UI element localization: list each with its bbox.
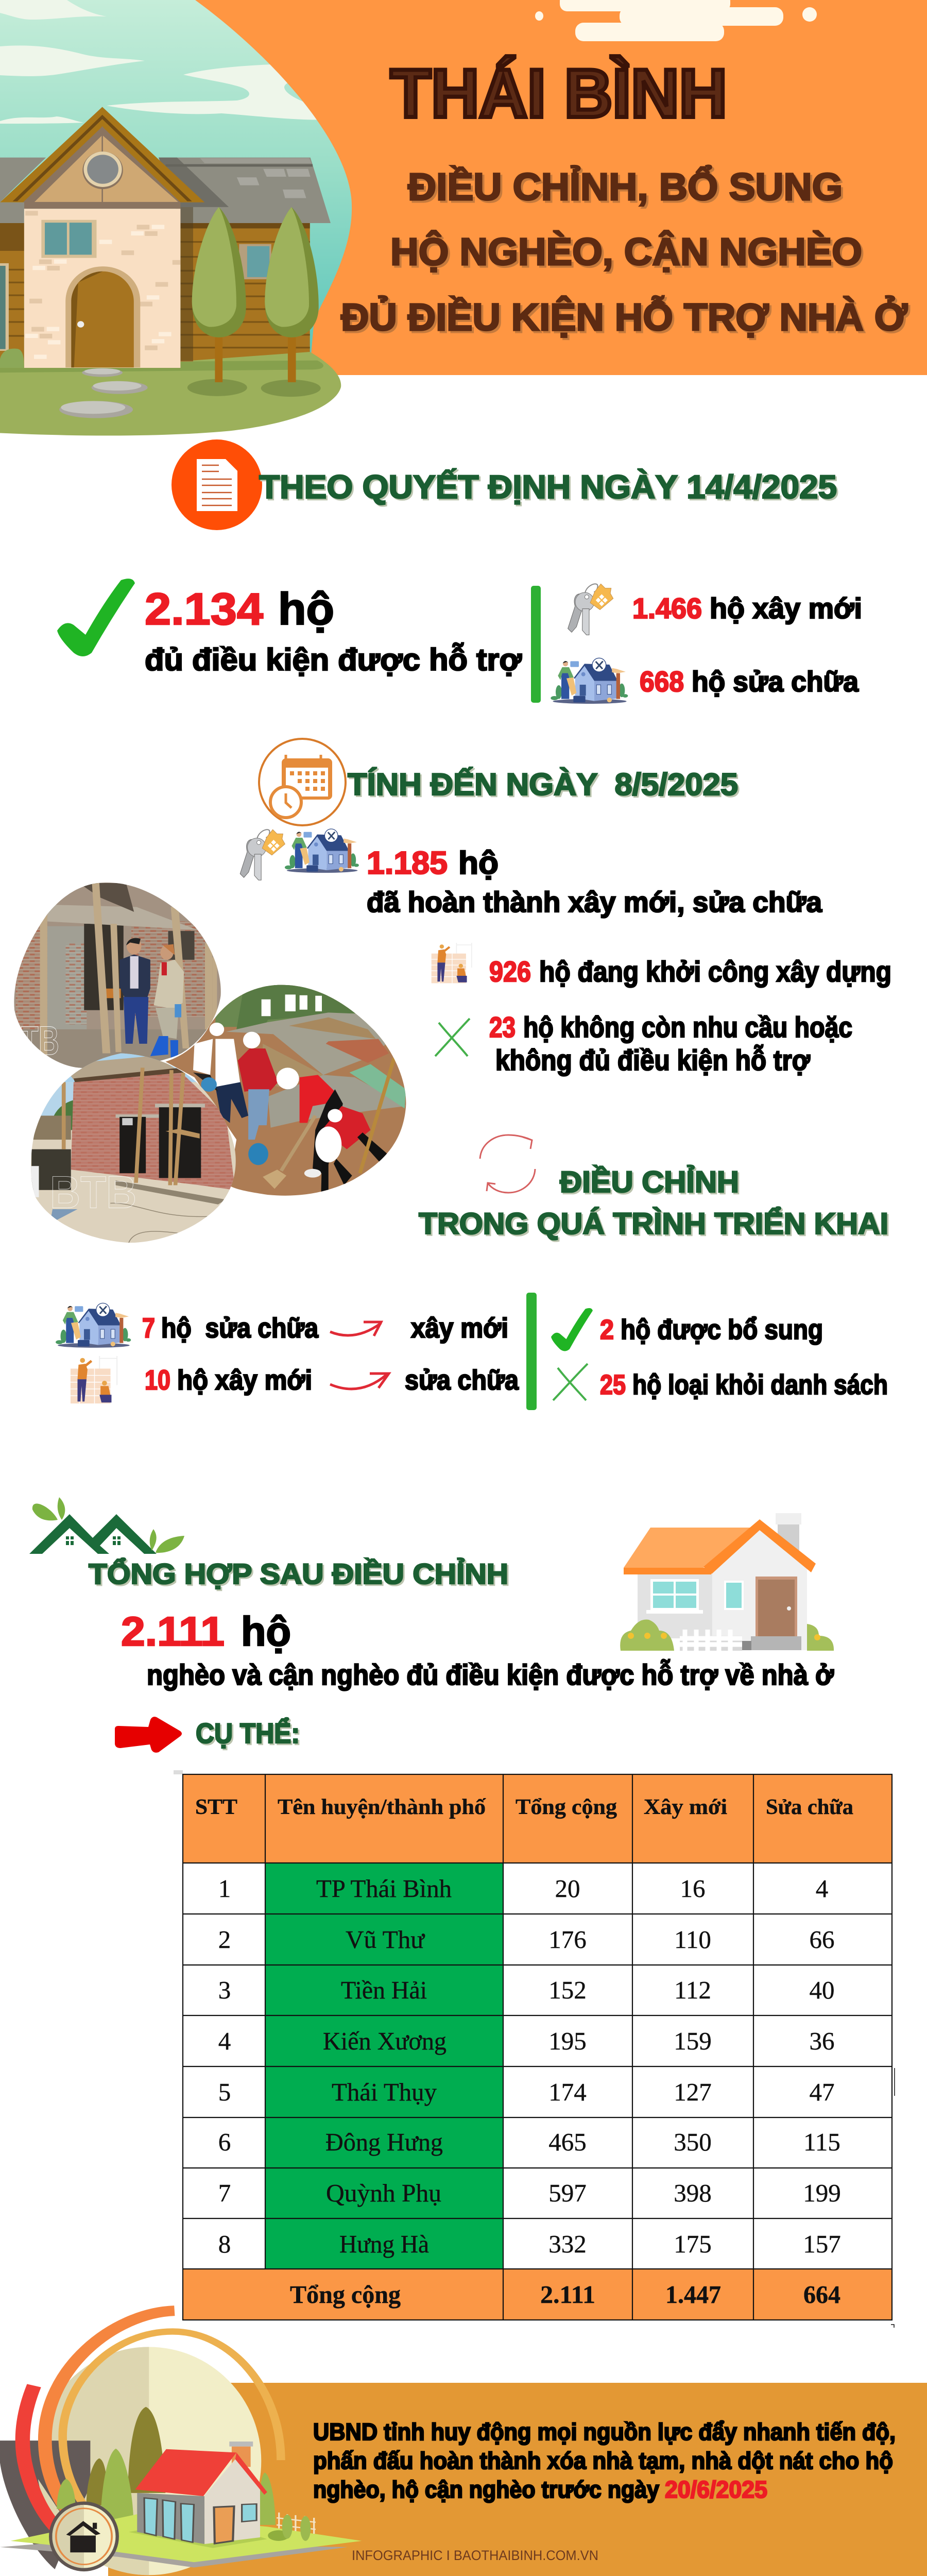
data table xyxy=(174,1770,895,2328)
row: 25 hộ loại khỏi: 25 xyxy=(600,1369,626,1400)
footer message: phấn đấu hoàn thành xóa nhà tạm, nhà dột nát cho hộ xyxy=(313,2447,893,2474)
stat: 926 hộ đang khởi công: hộ đang khởi công xây dựng xyxy=(539,955,891,988)
row: 7 hộ sửa chữa to xây mới: 7 xyxy=(142,1313,155,1344)
table header: Tổng cộng xyxy=(516,1795,617,1819)
stat: 23 hộ không còn nhu cầu: hộ không còn nhu cầu hoặc xyxy=(523,1011,852,1043)
footer message: UBND tỉnh huy động mọi nguồn lực đẩy nhanh tiến độ, xyxy=(313,2418,896,2445)
stat: 23 hộ không còn nhu cầu: 23 xyxy=(489,1011,516,1043)
table row 8: Hưng Hà xyxy=(339,2230,429,2258)
icon: worker xyxy=(71,1356,117,1403)
row: 10 hộ xây mới to sửa chữa: sửa chữa xyxy=(405,1365,519,1396)
icon: cross xyxy=(553,1364,588,1400)
table row 3: 152 xyxy=(548,1976,587,2004)
icon: check mark xyxy=(57,579,135,656)
table row 1: 16 xyxy=(680,1874,706,1903)
table header: Tên huyện/thành phố xyxy=(278,1795,486,1819)
table row 1: 4 xyxy=(816,1874,828,1903)
table row 5 xyxy=(218,2078,834,2106)
table row 5: 174 xyxy=(548,2078,587,2106)
sky dome xyxy=(0,0,352,361)
table row 2: 66 xyxy=(810,1925,834,1954)
heading: điều chỉnh: ĐIỀU CHỈNH xyxy=(560,1165,739,1199)
stat: 2.134 hộ: 2.134 xyxy=(145,584,263,634)
table row 7: 199 xyxy=(803,2179,841,2207)
photo: brick house: BTB xyxy=(50,1167,136,1218)
table header: Xây mới xyxy=(644,1795,727,1819)
table row 2: Vũ Thư xyxy=(346,1925,425,1954)
table header: STT xyxy=(195,1795,237,1819)
house illustration xyxy=(0,107,341,436)
table row 4: 4 xyxy=(218,2027,231,2055)
stat: 1.185 hộ: hộ xyxy=(458,845,499,881)
table grid xyxy=(183,1774,895,2328)
table row 8: 332 xyxy=(548,2230,587,2258)
table row 3: Tiền Hải xyxy=(341,1976,427,2004)
table row 1: TP Thái Bình xyxy=(316,1874,452,1903)
row: 10 hộ xây mới to sửa chữa: hộ xây mới xyxy=(177,1365,312,1396)
icon: house repair xyxy=(551,658,628,704)
table row 7: Quỳnh Phụ xyxy=(326,2179,441,2207)
table row 6 xyxy=(218,2128,840,2156)
table row 1: 1 xyxy=(218,1874,231,1903)
cream clouds xyxy=(535,0,817,41)
stat: 926 hộ đang khởi công: 926 xyxy=(489,955,531,988)
table row 8: 8 xyxy=(218,2230,231,2258)
footer illustration xyxy=(0,2311,362,2575)
stat: 668 hộ sửa chữa: hộ sửa chữa xyxy=(692,665,859,698)
row: 25 hộ loại khỏi: hộ loại khỏi danh sách xyxy=(632,1369,888,1400)
table total row: 664 xyxy=(803,2280,840,2309)
table row 1: 20 xyxy=(555,1874,580,1903)
table row 7: 7 xyxy=(218,2179,231,2207)
table header xyxy=(195,1795,853,1819)
stat: 2.134 hộ xyxy=(145,584,522,677)
sky clouds xyxy=(0,0,332,124)
arrow xyxy=(330,1374,389,1389)
table row 3: 112 xyxy=(674,1976,711,2004)
table row 8: 157 xyxy=(803,2230,841,2258)
table row 7 xyxy=(218,2179,841,2207)
heading: tổng hợp: TỔNG HỢP SAU ĐIỀU CHỈNH xyxy=(89,1557,508,1590)
table row 4: 195 xyxy=(548,2027,587,2055)
stat: 2.134 hộ: đủ điều kiện được hỗ trợ xyxy=(145,642,522,677)
heading: điều chỉnh xyxy=(419,1165,888,1241)
row: 10 hộ xây mới to sửa chữa: 10 xyxy=(145,1365,170,1396)
heading: điều chỉnh: TRONG QUÁ TRÌNH TRIỂN KHAI xyxy=(419,1207,888,1241)
headline lines: ĐIỀU CHỈNH, BỔ SUNG xyxy=(408,165,843,208)
icon: green roofs logo xyxy=(29,1497,184,1554)
table row 2: 2 xyxy=(218,1925,231,1954)
table row 6: 465 xyxy=(548,2128,587,2156)
table row 4: 159 xyxy=(674,2027,712,2055)
icon: worker xyxy=(432,943,472,983)
title: Thái Bình: THÁI BÌNH xyxy=(390,56,727,132)
photo: two people at construction site: TB xyxy=(21,1018,59,1063)
stat: 2.111 hộ: hộ xyxy=(241,1608,291,1654)
icon: document xyxy=(171,439,262,530)
stat: 2.111 hộ: nghèo và cận nghèo đủ điều kiện được hỗ trợ về nhà ở xyxy=(147,1658,834,1691)
orange background xyxy=(0,0,927,375)
table row 8 xyxy=(218,2230,841,2258)
row: 10 hộ xây mới to sửa chữa xyxy=(145,1365,519,1396)
table row 6: Đông Hưng xyxy=(325,2128,443,2156)
table row 1 xyxy=(218,1874,828,1903)
stat: 1.466 hộ xây mới: hộ xây mới xyxy=(710,592,862,624)
stat: 1.466 hộ xây mới xyxy=(632,592,862,624)
row: 2 hộ được bổ sung: hộ được bổ sung xyxy=(621,1314,823,1345)
table row 2: 176 xyxy=(548,1925,587,1954)
photo: brick house xyxy=(26,1051,242,1245)
row: 7 hộ sửa chữa to xây mới xyxy=(142,1313,508,1344)
icon: keys xyxy=(568,584,613,635)
arrow xyxy=(330,1322,381,1336)
table total row xyxy=(290,2280,840,2309)
table header: Sửa chữa xyxy=(766,1795,853,1819)
icon: orange roof house xyxy=(620,1513,834,1651)
row: 2 hộ được bổ sung: 2 xyxy=(600,1314,614,1345)
section heading: theo quyết định xyxy=(171,439,837,530)
table row 4 xyxy=(218,2027,834,2055)
icon: house repair small xyxy=(285,829,359,873)
table row 3 xyxy=(218,1976,834,2004)
section heading: tính đến ngày: TÍNH ĐẾN NGÀY 8/5/2025 xyxy=(348,767,738,802)
stat: 23 hộ không còn nhu cầu: không đủ điều kiện hỗ trợ xyxy=(495,1044,810,1076)
table row 5: 47 xyxy=(810,2078,834,2106)
green divider xyxy=(526,1293,537,1410)
photo: two people at construction site xyxy=(14,883,221,1068)
table total row: 1.447 xyxy=(665,2280,721,2309)
headline lines: ĐỦ ĐIỀU KIỆN HỖ TRỢ NHÀ Ở xyxy=(341,296,908,338)
stat: 1.185 hộ: 1.185 xyxy=(367,845,448,881)
heading: cụ thể: CỤ THỂ: xyxy=(196,1717,300,1749)
table row 6: 6 xyxy=(218,2128,231,2156)
badge xyxy=(49,2501,119,2571)
icon: house repair xyxy=(56,1303,131,1348)
table row 2 xyxy=(218,1925,834,1954)
table total row: 2.111 xyxy=(540,2280,595,2309)
table row 6: 115 xyxy=(803,2128,840,2156)
footer message: nghèo, hộ cận nghèo trước ngày xyxy=(313,2476,659,2503)
stat: 1.185 hộ: đã hoàn thành xây mới, sửa chữa xyxy=(367,886,822,918)
table row 3: 3 xyxy=(218,1976,231,2004)
table fills xyxy=(174,1770,892,2320)
table row 5: Thái Thụy xyxy=(332,2078,437,2106)
row: 7 hộ sửa chữa to xây mới: xây mới xyxy=(411,1313,508,1344)
icon: red arrow xyxy=(115,1717,182,1753)
table row 7: 398 xyxy=(674,2179,712,2207)
table row 5: 5 xyxy=(218,2078,231,2106)
stat: 1.466 hộ xây mới: 1.466 xyxy=(632,592,702,624)
table row 4: 36 xyxy=(810,2027,834,2055)
icon: cross xyxy=(435,1019,470,1056)
table total row: Tổng cộng xyxy=(290,2280,401,2309)
headline lines: HỘ NGHÈO, CẬN NGHÈO xyxy=(390,230,862,273)
icon: keys small xyxy=(240,829,285,880)
stat: 23 hộ không còn nhu cầu xyxy=(489,1011,852,1076)
stat: 2.111 hộ: 2.111 xyxy=(121,1608,225,1654)
icon: check mark xyxy=(551,1308,593,1351)
footer credit: INFOGRAPHIC I BAOTHAIBINH.COM.VN xyxy=(352,2548,598,2563)
table row 3: 40 xyxy=(810,1976,834,2004)
icon: calendar xyxy=(259,739,346,825)
row: 7 hộ sửa chữa to xây mới: hộ sửa chữa xyxy=(161,1313,319,1344)
footer band xyxy=(108,2383,927,2576)
green divider xyxy=(531,586,541,703)
table row 8: 175 xyxy=(674,2230,712,2258)
table row 2: 110 xyxy=(674,1925,711,1954)
footer message: 20/6/2025 xyxy=(665,2476,767,2503)
stat: 2.134 hộ: hộ xyxy=(278,584,334,634)
photo collage xyxy=(0,876,413,1245)
stat: 2.111 hộ xyxy=(121,1608,834,1691)
section heading: tính đến ngày xyxy=(259,739,738,825)
table row 5: 127 xyxy=(674,2078,712,2106)
headline lines xyxy=(341,165,908,338)
header banner xyxy=(0,0,927,436)
stat: 1.185 hộ xyxy=(367,845,822,918)
stat: 668 hộ sửa chữa: 668 xyxy=(640,665,684,698)
table row 6: 350 xyxy=(674,2128,712,2156)
footer message xyxy=(313,2418,896,2503)
icon: cycle arrows xyxy=(480,1135,535,1193)
photo: volunteers digging foundation xyxy=(163,981,413,1202)
table row 4: Kiến Xương xyxy=(323,2027,447,2055)
section heading: theo quyết định: THEO QUYẾT ĐỊNH NGÀY 14/4/2025 xyxy=(259,468,837,505)
table row 7: 597 xyxy=(548,2179,587,2207)
